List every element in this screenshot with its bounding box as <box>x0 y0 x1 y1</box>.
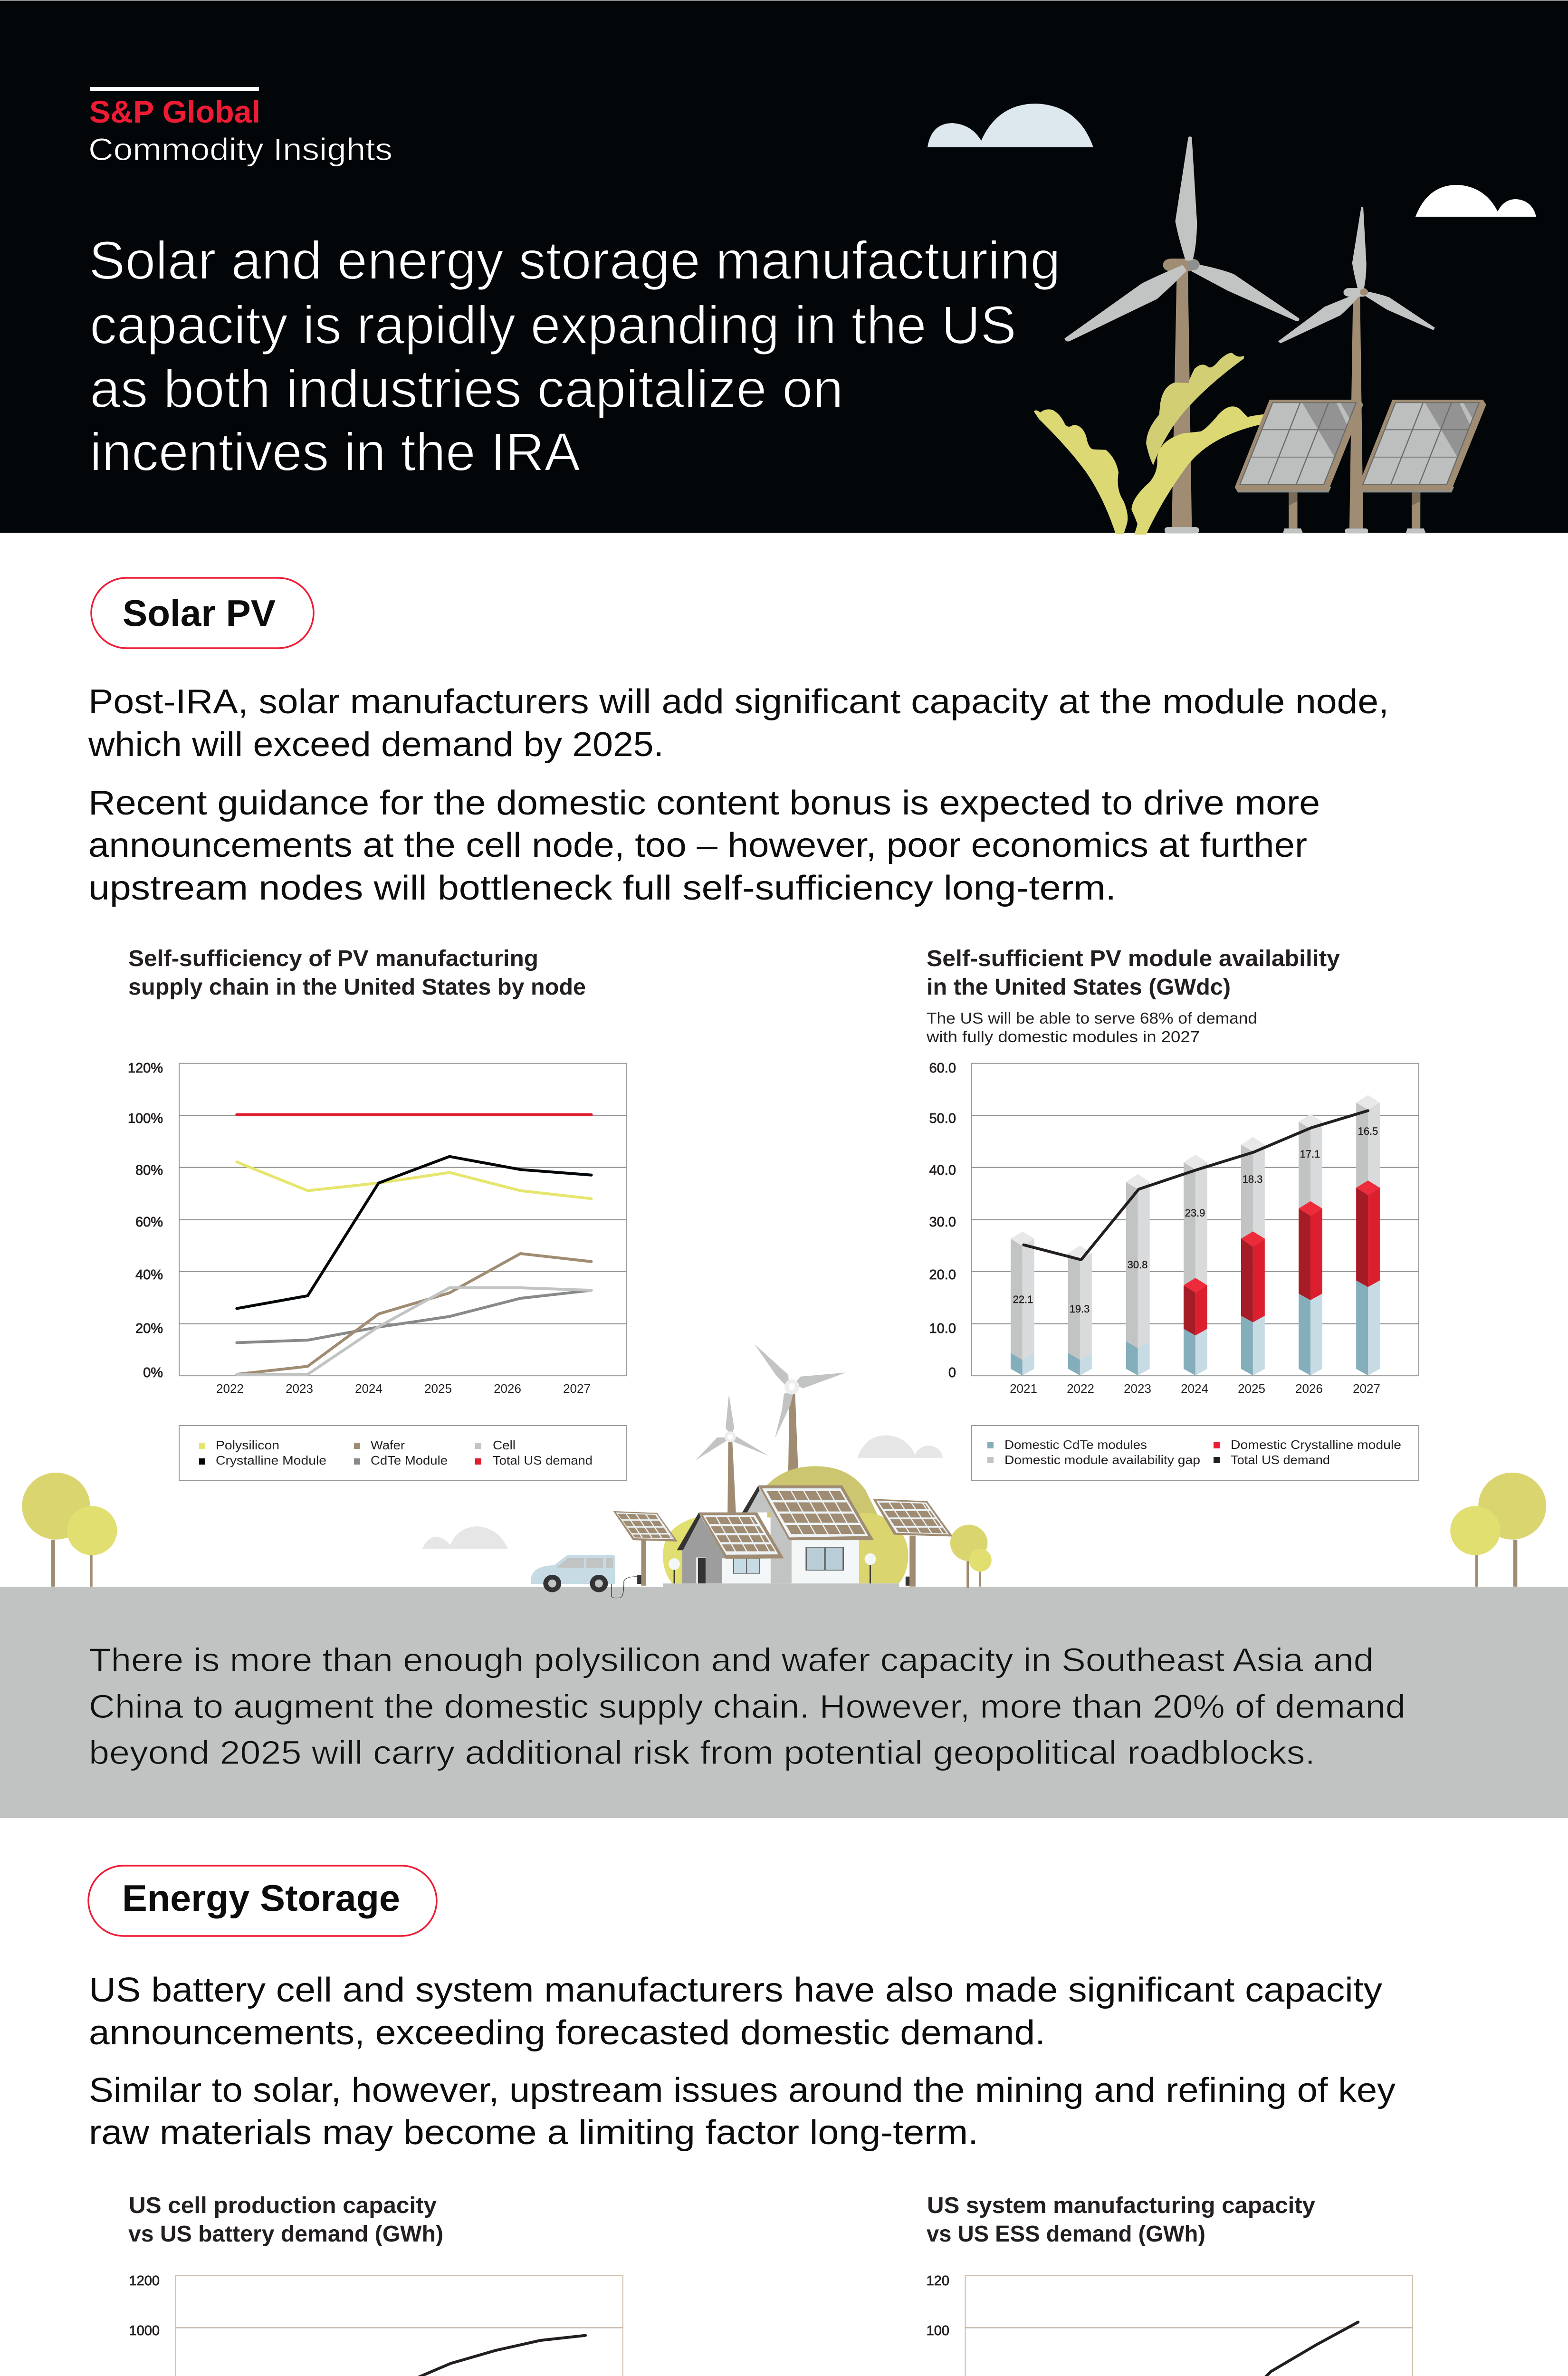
legend <box>972 1426 1419 1481</box>
x axis labels: 2022 <box>216 1381 244 1396</box>
icon: electric car charging <box>531 1555 641 1598</box>
y axis labels: 1000 <box>129 2323 160 2338</box>
icon: small wind turbine <box>1278 207 1435 533</box>
panel: solar grey note band <box>0 1587 1568 1818</box>
x axis labels: 2026 <box>494 1381 521 1396</box>
y axis labels: 0 <box>948 1365 956 1380</box>
y axis labels: 120 <box>927 2273 949 2289</box>
bars: domestic CdTe modules <box>1011 1281 1380 1375</box>
text block: solar intro <box>88 683 1389 907</box>
title: incentives in the IRA <box>90 422 581 482</box>
chart heading: Self-sufficiency of PV manufacturing <box>128 946 538 971</box>
illustration: wind turbines, plants and solar panels <box>1034 136 1486 535</box>
title: Solar and energy storage manufacturing <box>89 230 1061 290</box>
y axis labels: 60% <box>135 1215 163 1230</box>
chart heading: supply chain in the United States by node <box>128 975 586 1000</box>
bar value labels: 16.5 <box>1358 1125 1378 1137</box>
title: capacity is rapidly expanding in the US <box>90 295 1016 355</box>
text block: storage intro: Similar to solar, however, upstream issues around the mining and refining of key <box>89 2071 1396 2109</box>
chart subtitle <box>926 1009 1257 1045</box>
y axis labels <box>927 2273 949 2376</box>
chart heading <box>128 2193 443 2247</box>
x axis labels: 2024 <box>1181 1381 1208 1396</box>
series: CdTe module <box>237 1290 592 1343</box>
chart subtitle: with fully domestic modules in 2027 <box>926 1028 1200 1045</box>
bar value labels <box>1013 1125 1378 1315</box>
bar value labels: 30.8 <box>1128 1259 1147 1271</box>
icon: small house <box>677 1513 784 1583</box>
stacked bar chart plot <box>972 1063 1419 1376</box>
icon: bushes <box>663 1466 908 1583</box>
title <box>89 230 1061 482</box>
legend: Total US demand <box>493 1453 593 1467</box>
icon: yellow plant leaves <box>1034 353 1265 535</box>
chart: US cell production capacity <box>128 2193 623 2376</box>
heading pill: Solar PV <box>91 578 314 648</box>
series: crystalline module <box>237 1157 592 1309</box>
icon: ground platform <box>663 1583 899 1587</box>
y axis labels <box>129 2273 160 2376</box>
logo: S&P Global Commodity Insights: Commodity Insights <box>88 132 392 167</box>
text block: solar note: China to augment the domestic supply chain. However, more than 20% of demand <box>89 1688 1405 1725</box>
bar value labels: 23.9 <box>1185 1207 1205 1219</box>
line chart plot <box>179 1063 626 1376</box>
y axis labels: 20% <box>135 1321 163 1336</box>
stacked bar chart plot <box>176 2276 623 2376</box>
legend: Cell <box>493 1438 516 1452</box>
chart heading <box>927 2193 1315 2247</box>
text block: storage intro: announcements, exceeding forecasted domestic demand. <box>89 2014 1045 2052</box>
x axis labels <box>216 1381 591 1396</box>
title: as both industries capitalize on <box>90 359 843 419</box>
chart heading: US system manufacturing capacity <box>927 2193 1315 2218</box>
section: Energy Storage <box>0 1866 1568 2376</box>
text block: solar intro: Recent guidance for the domestic content bonus is expected to drive more <box>88 784 1320 822</box>
y axis labels: 50.0 <box>929 1111 956 1126</box>
icon: lamps <box>669 1553 876 1583</box>
y axis labels: 0% <box>143 1365 163 1380</box>
legend: Total US demand <box>1231 1453 1330 1467</box>
text block: solar intro: announcements at the cell node, too – however, poor economics at further <box>88 826 1307 864</box>
y axis labels <box>929 1061 956 1380</box>
text block: solar note: There is more than enough polysilicon and wafer capacity in Southeast Asia and <box>89 1641 1374 1678</box>
bar value labels: 19.3 <box>1070 1303 1090 1315</box>
icon: solar panel on post left <box>613 1511 678 1586</box>
series: total system manufacturing capacity <box>1012 2322 1358 2376</box>
chart heading <box>128 946 586 1000</box>
logo: S&P Global Commodity Insights: S&P Global <box>89 94 260 129</box>
icon: cloud <box>857 1435 943 1458</box>
bar value labels: 17.1 <box>1300 1148 1320 1160</box>
y axis labels: 120% <box>128 1061 163 1076</box>
chart heading: vs US battery demand (GWh) <box>128 2222 443 2247</box>
chart heading: Self-sufficient PV module availability <box>927 946 1340 971</box>
logo: S&P Global Commodity Insights <box>88 87 392 167</box>
icon: solar panel on post right <box>873 1499 953 1587</box>
series: polysilicon <box>237 1162 592 1198</box>
icon: main house <box>742 1485 874 1583</box>
legend: Crystalline Module <box>216 1453 326 1467</box>
legend: Polysilicon <box>216 1438 279 1452</box>
icon: white cloud <box>1415 185 1536 217</box>
bar chart plot <box>966 2276 1413 2376</box>
chart heading: US cell production capacity <box>129 2193 437 2218</box>
series: total US demand <box>237 1113 592 1116</box>
y axis labels: 30.0 <box>929 1215 956 1230</box>
chart: self-sufficient module availability <box>926 946 1419 1481</box>
chart heading <box>927 946 1340 1000</box>
chart heading: in the United States (GWdc) <box>927 975 1231 1000</box>
series: total US demand <box>1023 1111 1368 1260</box>
text block: solar note <box>89 1641 1405 1771</box>
text block: solar intro: upstream nodes will bottleneck full self-sufficiency long-term. <box>88 869 1116 907</box>
x axis labels: 2024 <box>355 1381 382 1396</box>
icon: solar panel left <box>1235 400 1363 533</box>
heading pill: Energy Storage: Energy Storage <box>122 1877 400 1919</box>
text block: solar note: beyond 2025 will carry additional risk from potential geopolitical roadblocks. <box>89 1734 1315 1771</box>
chart: self-sufficiency by node <box>128 946 626 1481</box>
x axis labels: 2022 <box>1067 1381 1094 1396</box>
x axis labels: 2023 <box>1124 1381 1151 1396</box>
illustration: trees left and right with cloud <box>22 1473 1546 1587</box>
y axis labels: 80% <box>135 1163 163 1178</box>
y axis labels <box>128 1061 163 1380</box>
icon: small trees <box>950 1525 992 1588</box>
bar value labels: 18.3 <box>1243 1173 1262 1185</box>
x axis labels <box>1010 1381 1380 1396</box>
bar value labels: 22.1 <box>1013 1293 1033 1305</box>
y axis labels: 40.0 <box>929 1163 956 1178</box>
x axis labels: 2021 <box>1010 1381 1037 1396</box>
chart subtitle: The US will be able to serve 68% of demand <box>927 1009 1257 1027</box>
heading pill: Energy Storage <box>88 1866 437 1936</box>
section: Solar PV <box>0 578 1568 1818</box>
legend: Domestic Crystalline module <box>1231 1437 1401 1452</box>
y axis labels: 20.0 <box>929 1267 956 1283</box>
y axis labels: 10.0 <box>929 1321 956 1336</box>
bars: domestic crystalline module <box>1184 1180 1380 1335</box>
legend: Domestic CdTe modules <box>1004 1437 1147 1452</box>
x axis labels: 2027 <box>563 1381 591 1396</box>
x axis labels: 2025 <box>424 1381 452 1396</box>
text block: storage intro: raw materials may become a limiting factor long-term. <box>89 2114 978 2152</box>
y axis labels: 40% <box>135 1267 163 1283</box>
legend: Domestic module availability gap <box>1004 1453 1200 1467</box>
chart: US system manufacturing capacity <box>927 2193 1413 2376</box>
y axis labels: 100% <box>128 1111 163 1126</box>
icon: light blue cloud <box>927 104 1093 147</box>
illustration: house with solar panels, turbines and electric car <box>531 1344 992 1598</box>
icon: wind turbine tall <box>754 1344 846 1472</box>
panel: header <box>0 0 1568 535</box>
x axis labels: 2026 <box>1295 1381 1323 1396</box>
text block: solar intro: Post-IRA, solar manufacturers will add significant capacity at the module node, <box>88 683 1389 721</box>
x axis labels: 2025 <box>1238 1381 1265 1396</box>
x axis labels: 2027 <box>1353 1381 1380 1396</box>
bars: availability gap <box>1011 1095 1380 1360</box>
icon: wind turbine short <box>696 1394 769 1513</box>
legend: CdTe Module <box>371 1453 448 1467</box>
series: wafer <box>237 1254 592 1374</box>
legend: Wafer <box>371 1438 405 1452</box>
x axis labels: 2023 <box>286 1381 313 1396</box>
series: total cell production capacity <box>227 2336 585 2376</box>
y axis labels: 1200 <box>129 2273 160 2289</box>
text block: storage intro <box>89 1971 1396 2152</box>
text block: solar intro: which will exceed demand by 2025. <box>88 726 664 764</box>
series: cell <box>237 1288 592 1374</box>
text block: storage intro: US battery cell and system manufacturers have also made significant capacity <box>89 1971 1382 2009</box>
heading pill: Solar PV: Solar PV <box>123 592 276 634</box>
y axis labels: 100 <box>927 2323 949 2338</box>
icon: solar panel right <box>1358 400 1486 533</box>
y axis labels: 60.0 <box>929 1061 956 1076</box>
chart heading: vs US ESS demand (GWh) <box>927 2222 1205 2247</box>
legend <box>179 1426 626 1481</box>
icon: large wind turbine <box>1064 136 1299 533</box>
